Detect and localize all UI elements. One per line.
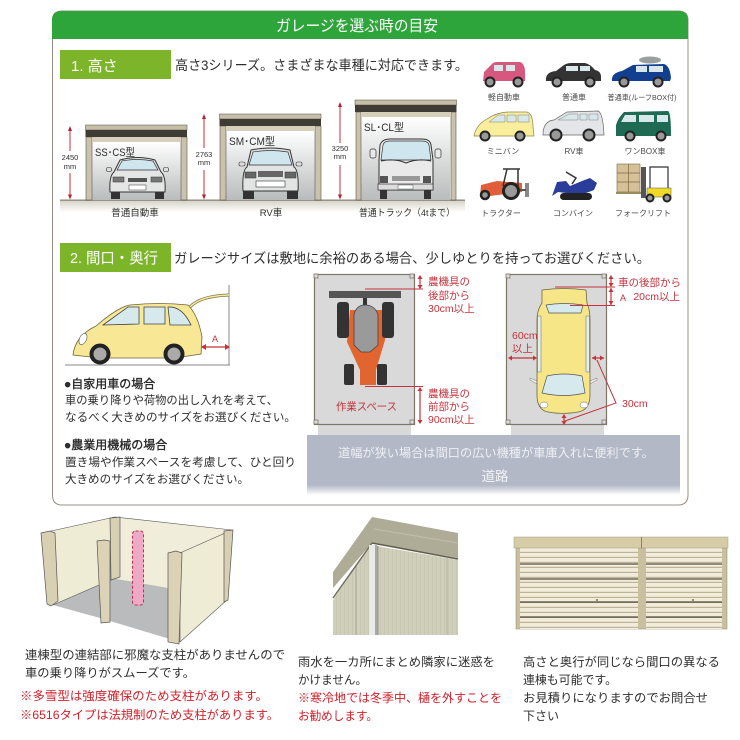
label: rear clearance car: 車の後部から	[618, 276, 681, 289]
label: front clearance tractor	[428, 387, 475, 426]
text: red cautions: ※多雪型は強度確保のため支柱があります。	[20, 688, 268, 703]
road: 道路	[482, 469, 509, 484]
text: farm machinery note: 置き場や作業スペースを考慮して、ひと回り	[65, 455, 296, 469]
photo: double shutter garage	[514, 537, 728, 629]
text: private car note: ●自家用車の場合	[64, 377, 155, 391]
rain gutter pipe	[369, 545, 377, 635]
text: gutter note: ※寒冷地では冬季中、樋を外すことを	[298, 690, 502, 705]
post: centre	[97, 540, 110, 623]
road	[307, 424, 680, 495]
label: side clearance 60cm	[512, 330, 538, 355]
label: side clearance 30cm: 30cm	[622, 398, 648, 410]
icon: sedan	[546, 63, 601, 102]
label: front clearance tractor: 農機具の	[428, 387, 470, 400]
ground strip	[60, 200, 465, 212]
text: farm machinery note	[64, 437, 296, 486]
label: rear clearance car: A	[620, 293, 626, 303]
photo: gutter corner	[333, 517, 458, 635]
icon: combine	[552, 172, 597, 218]
text: connected type note: 連棟型の連結部に邪魔な支柱がありませんので	[25, 647, 285, 662]
text: connected type note	[25, 647, 285, 680]
post: removed support	[132, 531, 144, 605]
icon: combine: コンバイン	[553, 209, 593, 218]
text: gutter note: お勧めします。	[298, 709, 378, 723]
height arrow 2763: mm	[198, 158, 210, 167]
clearance lines	[509, 276, 616, 424]
icon: tractor: トラクター	[481, 209, 521, 218]
section 2 description: ガレージサイズは敷地に余裕のある場合、少しゆとりを持ってお選びください。	[174, 250, 650, 266]
label: rear clearance car	[618, 276, 681, 303]
label: rear clearance tractor	[428, 275, 475, 315]
icon: minivan	[474, 112, 534, 156]
RV front view	[239, 148, 302, 199]
section 1 description: 高さ3シリーズ。さまざまな車種に対応できます。	[175, 57, 468, 73]
text: connection note: お見積りになりますのでお問合せ	[523, 690, 708, 705]
text: connection note	[523, 654, 720, 723]
text: connection note: 下さい	[523, 709, 559, 723]
post: far left	[41, 531, 58, 606]
text: red cautions	[20, 688, 279, 722]
label: rear clearance car: 20cm以上	[633, 291, 680, 303]
section heading 2: 2. 間口・奥行	[70, 250, 158, 267]
post: front	[168, 551, 182, 644]
post: far right	[224, 530, 233, 602]
height arrow 2763	[194, 114, 216, 200]
height arrow 2763: 2763	[196, 150, 212, 159]
icon: tractor	[480, 169, 529, 218]
side view car diagram	[65, 285, 230, 365]
garage SM-CM	[220, 114, 321, 200]
header bar: ガレージを選ぶ時の目安	[276, 17, 438, 35]
garage SS-CS	[86, 125, 187, 200]
label: front clearance tractor: 前部から	[428, 400, 470, 413]
text: farm machinery note: ●農業用機械の場合	[64, 437, 167, 452]
icon: forklift	[615, 164, 671, 218]
label: rear clearance tractor: 農機具の	[428, 275, 470, 288]
text: farm machinery note: 大きめのサイズをお選びください。	[65, 472, 249, 486]
text: red cautions: ※6516タイプは法規制のため支柱があります。	[20, 707, 279, 722]
label: side clearance 60cm: 以上	[512, 343, 533, 355]
truck front view	[370, 139, 441, 199]
floor plan: tractor: 作業スペース	[336, 400, 397, 413]
label: rear clearance tractor: 後部から	[428, 289, 470, 302]
clearance rear	[365, 275, 423, 424]
label: rear clearance tractor: 30cm以上	[428, 303, 475, 315]
label: front clearance tractor: 90cm以上	[428, 414, 475, 426]
dimension A: A	[212, 334, 218, 344]
text: private car note: 車の乗り降りや荷物の出し入れを考えて、	[65, 393, 278, 407]
header bar	[52, 11, 688, 39]
car top view	[530, 288, 597, 414]
garage captions	[111, 207, 455, 219]
text: gutter note: かけません。	[298, 673, 367, 687]
text: gutter note: 雨水を一カ所にまとめ隣家に迷惑を	[298, 654, 495, 669]
garage SM-CM: SM･CM型	[229, 134, 275, 148]
section heading 1: 1. 高さ	[71, 58, 118, 75]
tractor top view	[329, 291, 401, 385]
icon: one-box van: ワンBOX車	[625, 146, 665, 156]
photo: connected garage interior	[41, 517, 233, 644]
icon: minivan: ミニバン	[487, 147, 519, 156]
section heading 2	[60, 243, 171, 272]
text: gutter note	[298, 654, 502, 723]
text: private car note	[64, 377, 296, 424]
garage SS-CS: SS･CS型	[95, 145, 135, 159]
garage captions: RV車	[260, 207, 283, 219]
icon: kei car: 軽自動車	[488, 92, 520, 102]
height arrow 2450	[60, 126, 82, 200]
text: private car note: なるべく大きめのサイズをお選びください。	[65, 410, 296, 424]
height arrow 3250	[330, 102, 352, 200]
road: 道幅が狭い場合は間口の広い機種が車庫入れに便利です。	[338, 445, 654, 460]
text: connection note: 連棟も可能です。	[523, 672, 617, 687]
height arrow 2450: mm	[64, 162, 76, 171]
icon: RV	[543, 111, 604, 156]
icon: car with roof box: 普通車(ルーフBOX付)	[608, 92, 677, 102]
label: side clearance 60cm: 60cm	[512, 330, 538, 342]
height arrow 3250: mm	[334, 152, 346, 161]
post: back	[110, 517, 120, 580]
text: connected type note: 車の乗り降りがスムーズです。	[25, 665, 195, 680]
dimension A	[201, 334, 230, 350]
garage captions: 普通トラック（4tまで）	[359, 207, 455, 219]
vehicle grid	[474, 56, 677, 218]
main panel	[52, 11, 688, 505]
icon: sedan: 普通車	[562, 92, 586, 102]
floor plan: car	[506, 274, 616, 425]
icon: forklift: フォークリフト	[615, 209, 671, 218]
icon: RV: RV車	[565, 146, 583, 156]
garage captions: 普通自動車	[111, 207, 159, 219]
height arrow 3250: 3250	[332, 144, 348, 153]
height arrow 2450: 2450	[62, 153, 78, 162]
icon: car with roof box	[608, 56, 677, 102]
floor plan: tractor	[314, 274, 423, 424]
text: connection note: 高さと奥行が同じなら間口の異なる	[523, 654, 720, 669]
icon: one-box van	[616, 111, 671, 156]
garage SL-CL	[355, 100, 456, 200]
section heading 1	[60, 50, 171, 79]
car front view	[106, 158, 168, 199]
icon: kei car	[483, 62, 525, 102]
garage SL-CL: SL･CL型	[364, 120, 404, 134]
